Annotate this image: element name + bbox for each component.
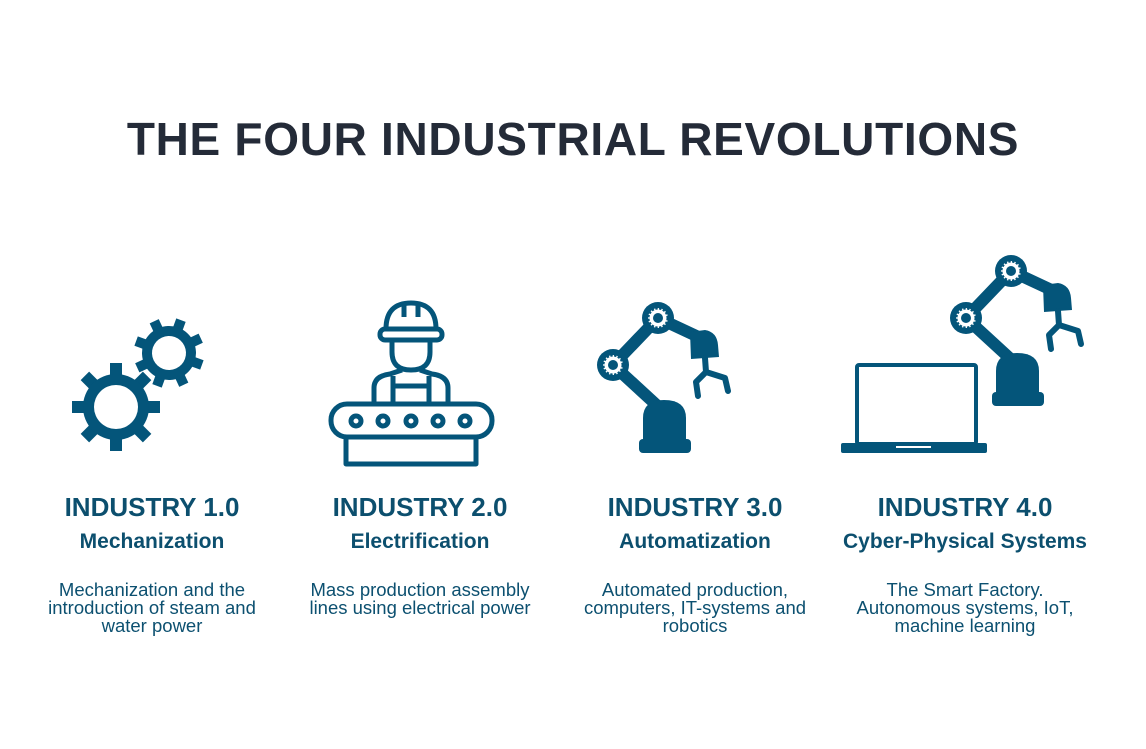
column: industry 1.0: Mechanization and the introduction of steam and water power (48, 579, 256, 636)
column: industry 4.0: Cyber-Physical Systems (843, 530, 1087, 553)
column: industry 4.0: The Smart Factory. (887, 579, 1043, 600)
column: industry 1.0: INDUSTRY 1.0 (65, 492, 239, 522)
icon: laptop and robot arm (841, 255, 1081, 453)
column: industry 3.0: INDUSTRY 3.0 (608, 492, 782, 522)
column: industry 3.0: Automatization (619, 530, 771, 553)
column: industry 4.0: Autonomous systems, IoT, machine learning (857, 597, 1073, 636)
icon: gears (72, 308, 214, 451)
column: industry 2.0 (309, 492, 531, 618)
title: THE FOUR INDUSTRIAL REVOLUTIONS (127, 113, 1019, 165)
icon: robot arm (597, 302, 728, 453)
column: industry 2.0: Mass production assembly lines using electrical power (309, 579, 531, 618)
column: industry 2.0: Electrification (351, 530, 489, 553)
column: industry 1.0: Mechanization (80, 530, 224, 553)
column: industry 2.0: INDUSTRY 2.0 (333, 492, 507, 522)
column: industry 1.0 (48, 492, 256, 636)
icon: worker at conveyor (331, 303, 492, 464)
column: industry 4.0: INDUSTRY 4.0 (878, 492, 1052, 522)
column: industry 4.0 (843, 492, 1087, 636)
column: industry 3.0: Automated production, computers, IT-systems and robotics (584, 579, 806, 636)
column: industry 3.0 (584, 492, 806, 636)
